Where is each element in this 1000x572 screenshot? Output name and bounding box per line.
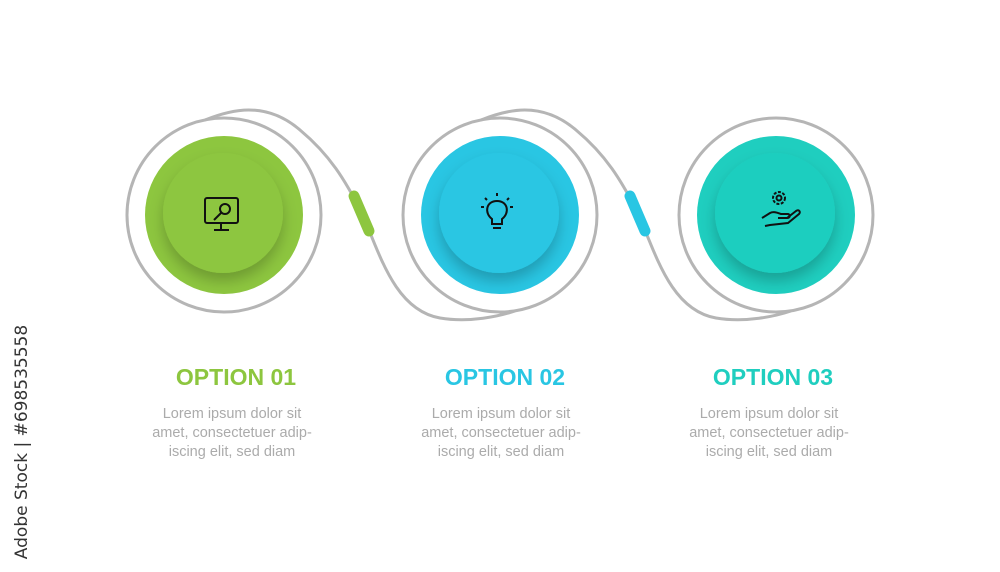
text: option 03: iscing elit, sed diam [706, 444, 832, 460]
pill: blue [630, 196, 645, 231]
text: option 03: Lorem ipsum dolor sit [700, 406, 838, 422]
text: option 01: Lorem ipsum dolor sit [163, 406, 301, 422]
pill: green [354, 196, 369, 231]
title: option 02: OPTION 02 [445, 364, 565, 390]
text: option 02: amet, consectetuer adip- [421, 425, 581, 441]
text: option 03: amet, consectetuer adip- [689, 425, 849, 441]
text: option 01 [152, 406, 312, 460]
text: option 02 [421, 406, 581, 460]
text: option 02: Lorem ipsum dolor sit [432, 406, 570, 422]
icon: monitor search [205, 198, 238, 230]
text: option 02: iscing elit, sed diam [438, 444, 564, 460]
icon: hand with gear [762, 192, 800, 226]
title: option 03: OPTION 03 [713, 364, 833, 390]
text: option 01: iscing elit, sed diam [169, 444, 295, 460]
text: option 01: amet, consectetuer adip- [152, 425, 312, 441]
title: option 01: OPTION 01 [176, 364, 296, 390]
icon: light bulb [481, 193, 513, 228]
circle 1 [145, 136, 303, 294]
circle 3 [697, 136, 855, 294]
circle 2 [421, 136, 579, 294]
watermark id: Adobe Stock | #698535558 [12, 325, 32, 559]
connector lines [127, 110, 873, 320]
text: option 03 [689, 406, 849, 460]
